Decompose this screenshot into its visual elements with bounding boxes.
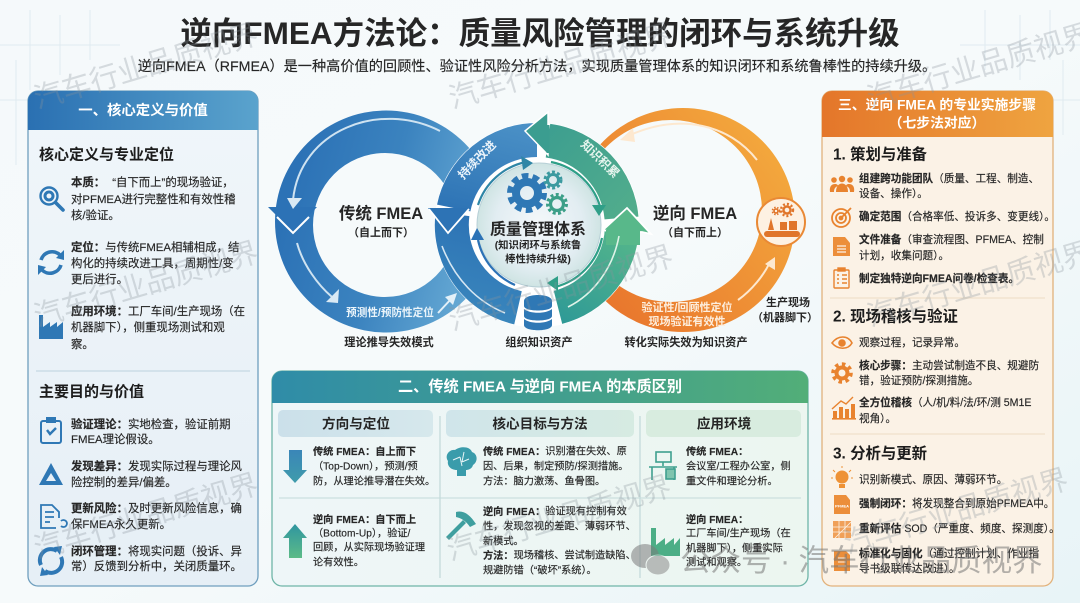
subtitle: 逆向FMEA（RFMEA）是一种高价值的回顾性、验证性风险分析方法，实现质量管理体系的知识闭环和系统鲁棒性的持续升级。 [138, 58, 936, 75]
icon: target [832, 208, 851, 227]
text: reverse goals: 逆向 FMEA：验证现有控制有效 [483, 504, 627, 518]
label: verification positioning [641, 300, 733, 328]
text: all-round audit: 视角）。 [859, 412, 896, 425]
icon: sync arrows [38, 250, 64, 275]
wechat watermark: 公众号 · 汽车行业品质视界 [680, 544, 1043, 578]
text: update risk: 保FMEA永久更新。 [71, 517, 171, 531]
text: traditional goals [483, 444, 628, 488]
text: traditional direction: 传统 FMEA：自上而下 [313, 444, 416, 458]
watermarks: 汽车行业品质视界 [443, 470, 675, 567]
column header: goals [446, 410, 634, 437]
text: environment: 机器脚下），侧重现场测试和观 [71, 320, 225, 334]
label: verification positioning: 现场验证有效性 [648, 314, 726, 328]
icon: database [524, 295, 552, 330]
label: knowledge accumulation: 知识积累 [578, 137, 623, 181]
text: traditional direction [313, 444, 435, 488]
heading: step 3: 3. 分析与更新 [833, 444, 927, 462]
label: continuous improvement: 持续改进 [455, 137, 499, 182]
label: verification positioning: 验证性/回顾性定位 [641, 300, 733, 314]
text: reverse direction: 论有效性。 [313, 556, 364, 568]
panel: implementation steps [822, 91, 1060, 586]
column header: direction [278, 410, 433, 437]
text: key steps: 核心步骤：主动尝试制造不良、规避防 [859, 359, 1039, 372]
text: documents: 计划，收集问题）。 [859, 249, 949, 262]
text: reverse direction: （Bottom-Up），验证/ [313, 526, 411, 540]
text: reverse direction: 逆向 FMEA：自下而上 [313, 512, 416, 526]
caption: theory: 理论推导失效模式 [344, 335, 434, 349]
text: team: 组建跨功能团队（质量、工程、制造、 [859, 172, 1039, 185]
text: traditional environment: 会议室/工程办公室，侧 [686, 460, 791, 472]
label: reverse FMEA [653, 203, 737, 239]
label: reverse FMEA: 逆向 FMEA [653, 203, 737, 223]
text: forced closure: 强制闭环：将发现整合到原始PFMEA中。 [859, 497, 1054, 510]
text: reverse goals: 方法：现场稽核、尝试制造缺陷、 [483, 548, 636, 562]
icon: closed loop [40, 546, 62, 576]
icon: clipboard [41, 418, 61, 443]
text: reverse environment [686, 512, 791, 568]
text: key steps [859, 359, 1039, 387]
right ring: reverse FMEA [571, 108, 795, 332]
text: standardize: 导书级联传达改进）。 [859, 562, 960, 575]
label: reverse FMEA: （自下而上） [662, 225, 728, 239]
caption: knowledge assets: 组织知识资产 [505, 335, 573, 349]
text: all-round audit: 全方位稽核（人/机/料/法/环/测 5M1E [859, 396, 1031, 409]
panel header: 二、传统 FMEA 与逆向 FMEA 的本质区别 [398, 378, 682, 396]
panel header [28, 91, 258, 130]
text: reverse goals: 规避防错（“破坏”系统）。 [483, 564, 597, 576]
label: production floor: （机器脚下） [752, 310, 818, 324]
text: essence: 本质： “自下而上”的现场验证， [71, 175, 234, 189]
text: reverse environment: 机器脚下），侧重实际 [686, 542, 783, 554]
icon: production line badge [757, 198, 805, 246]
column header: environment [646, 410, 801, 437]
text: new modes: 识别新模式、原因、薄弱环节。 [859, 473, 1007, 486]
text: re-evaluate: 重新评估 SOD（严重度、频度、探测度）。 [859, 522, 1060, 535]
text: environment: 察。 [71, 337, 94, 351]
column header: environment: 应用环境 [697, 416, 752, 432]
icon: hammer [446, 512, 476, 540]
watermarks: 汽车行业品质视界 [445, 240, 677, 337]
icon: standards document [834, 551, 850, 571]
label: traditional FMEA: （自上而下） [348, 225, 414, 239]
icon: document [833, 237, 850, 256]
center ring [428, 112, 651, 330]
text: closed loop management: 常）反馈到分析中，关闭质量环。 [71, 559, 242, 573]
label: production floor: 生产现场 [766, 295, 810, 309]
text: checklist: 制定独特逆向FMEA问卷/检查表。 [859, 272, 1019, 285]
text: all-round audit [859, 396, 1031, 425]
text: verify theory: 验证理论：实地检查，验证前期 [71, 417, 230, 431]
text: environment [71, 304, 245, 351]
left ring: traditional FMEA [268, 111, 497, 333]
label: traditional FMEA [339, 203, 423, 239]
panel: comparison [272, 371, 808, 586]
icon: factory [39, 315, 63, 339]
heading: core definition: 核心定义与专业定位 [39, 146, 174, 164]
text: find gaps: 险控制的差异/偏差。 [71, 475, 177, 489]
text: standardize: 标准化与固化（通过控制计划、作业指 [859, 547, 1039, 560]
icon: magnifier gear [40, 188, 63, 210]
heading: step 2: 2. 现场稽核与验证 [833, 306, 958, 326]
text: essence: 对PFMEA进行完整性和有效性稽 [71, 192, 236, 206]
text: find gaps: 发现差异：发现实际过程与理论风 [71, 459, 242, 473]
icon: up arrow [283, 524, 307, 558]
text: reverse goals: 新模式。 [483, 534, 524, 548]
text: reverse goals: 性，发现忽视的差距、薄弱环节、 [483, 520, 636, 532]
icon: gear [833, 364, 851, 382]
panel header: （七步法对应） [889, 114, 985, 130]
diagram: three interlocking loops [268, 108, 818, 349]
text: closed loop management: 闭环管理：将现实问题（投诉、异 [71, 544, 242, 558]
text: reverse environment: 工厂车间/生产现场（在 [686, 526, 791, 540]
label: quality management system: 棒性持续升级) [505, 252, 571, 266]
icon: eye [832, 337, 852, 348]
text: find gaps [71, 459, 242, 489]
icon: brain [447, 447, 477, 476]
column header: direction: 方向与定位 [322, 416, 390, 432]
icon: bulb [831, 466, 853, 488]
center disc [477, 163, 601, 287]
icon: down arrow [283, 450, 307, 483]
text: positioning [71, 240, 239, 286]
text: closed loop management [71, 544, 242, 573]
watermarks: 汽车行业品质视界 [30, 236, 262, 333]
text: environment: 应用环境：工厂车间/生产现场（在 [71, 304, 245, 318]
text: traditional direction: 防，从理论推导潜在失效。 [313, 474, 435, 488]
text: traditional environment [686, 444, 791, 488]
label: predictive positioning: 预测性/预防性定位 [346, 306, 434, 319]
column header: goals: 核心目标与方法 [492, 416, 588, 432]
text: documents: 文件准备（审查流程图、PFMEA、控制 [859, 233, 1044, 246]
panel header [272, 371, 808, 403]
text: verify theory [71, 417, 230, 446]
text: positioning: 定位：与传统FMEA相辅相成，结 [71, 240, 239, 254]
icon: checklist [834, 268, 849, 288]
text: observe: 观察过程，记录异常。 [859, 336, 965, 349]
text: traditional environment: 传统 FMEA： [686, 444, 748, 458]
label: production floor [752, 295, 818, 324]
text: positioning: 构化的持续改进工具，周期性/变 [71, 256, 234, 270]
text: essence: 核/验证。 [71, 208, 120, 222]
heading: main purposes: 主要目的与价值 [39, 382, 144, 400]
text: reverse goals [483, 504, 636, 576]
label: traditional FMEA: 传统 FMEA [339, 203, 423, 223]
heading: step 1: 1. 策划与准备 [833, 144, 928, 164]
caption: convert failures: 转化实际失效为知识资产 [624, 335, 748, 349]
text: key steps: 错，验证预防/探测措施。 [859, 374, 978, 387]
text: documents [859, 233, 1044, 262]
icon: green factory [651, 528, 680, 556]
text: scope: 确定范围（合格率低、投诉多、变更线）。 [859, 210, 1055, 223]
text: traditional goals: 传统 FMEA：识别潜在失效、原 [483, 444, 627, 458]
text: team: 设备、操作）。 [859, 187, 928, 200]
text: reverse direction: 回顾，从实际现场验证理 [313, 540, 425, 554]
text: verify theory: FMEA理论假设。 [71, 432, 160, 446]
title: 逆向FMEA方法论：质量风险管理的闭环与系统升级 [180, 15, 900, 51]
icon: document refresh [41, 505, 67, 528]
text: traditional direction: （Top-Down），预测/预 [313, 460, 418, 472]
text: reverse environment: 测试和观察。 [686, 556, 747, 568]
icon: bar chart [832, 397, 856, 420]
label: quality management system: 质量管理体系 [490, 220, 586, 238]
text: positioning: 更后进行。 [71, 273, 128, 286]
panel header [822, 91, 1053, 137]
watermarks: 汽车行业品质视界 [30, 18, 262, 115]
icon: delta triangle [39, 463, 63, 485]
text: standardize [859, 547, 1039, 575]
text: traditional goals: 因、后果，制定预防/探测措施。 [483, 460, 628, 472]
icon: team [830, 176, 854, 192]
icon: gears [510, 172, 566, 214]
watermarks: 汽车行业品质视界 [30, 468, 262, 565]
text: traditional goals: 方法：脑力激荡、鱼骨图。 [483, 474, 605, 488]
panel header: 三、逆向 FMEA 的专业实施步骤 [838, 96, 1036, 112]
label: quality management system: (知识闭环与系统鲁 [495, 238, 581, 252]
text: reverse environment: 逆向 FMEA： [686, 512, 748, 526]
text: essence [71, 175, 236, 222]
text: reverse direction [313, 512, 425, 568]
panel header: 一、核心定义与价值 [78, 101, 208, 119]
label: quality management system [490, 220, 586, 266]
text: team [859, 172, 1039, 200]
icon: PFMEA file: PFMEA [835, 504, 849, 508]
icon: PFMEA file [834, 495, 850, 514]
watermarks: 汽车行业品质视界 [840, 463, 1072, 560]
text: update risk: 更新风险：及时更新风险信息，确 [71, 501, 242, 515]
icon: office desk [649, 452, 677, 480]
watermarks: 汽车行业品质视界 [445, 18, 677, 115]
text: update risk [71, 501, 242, 531]
icon: SOD grid [833, 521, 851, 538]
text: traditional environment: 重文件和理论分析。 [686, 474, 778, 488]
panel: core definition and value [28, 91, 258, 586]
